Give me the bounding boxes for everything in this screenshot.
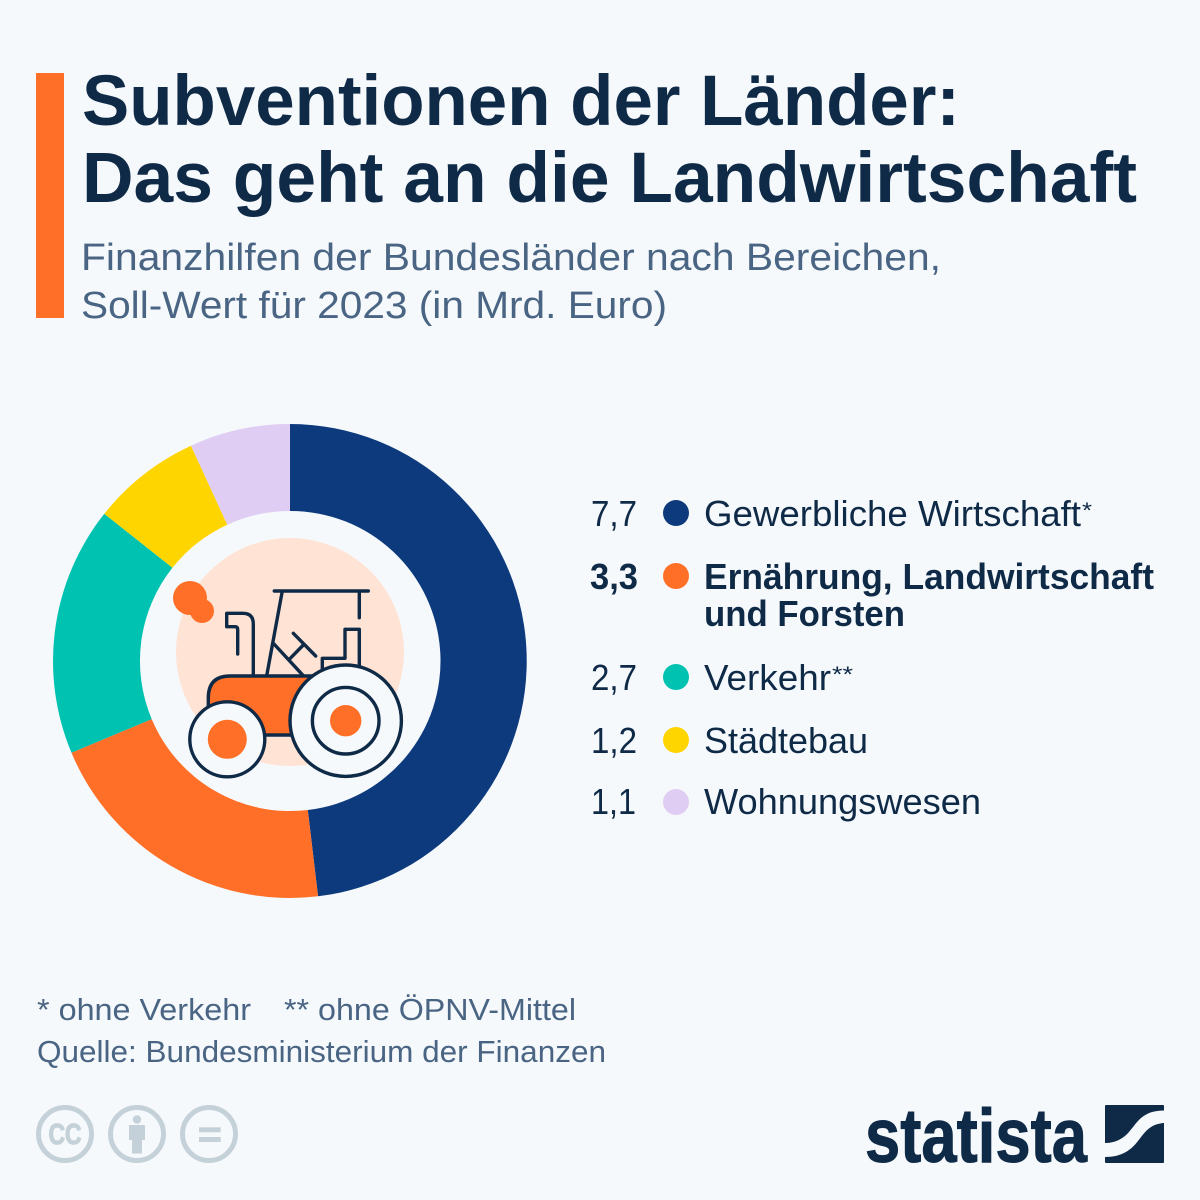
- segment: Verkehr: [53, 514, 172, 753]
- footnotes: ** ohne ÖPNV-Mittel: [284, 992, 576, 1027]
- legend row: Ernährung, Landwirtschaft und Forsten: 3,3: [590, 556, 638, 597]
- icon: smoke: [173, 581, 214, 623]
- title: Subventionen der Länder:: [82, 62, 960, 141]
- logo mark: [1105, 1105, 1164, 1163]
- legend: [590, 493, 1154, 822]
- accent bar: [36, 73, 64, 318]
- tractor body: [208, 676, 315, 735]
- legend row: Gewerbliche Wirtschaft: 7,7: [591, 493, 637, 534]
- icon: attribution: [110, 1108, 164, 1160]
- icon: tractor: [173, 538, 404, 777]
- subtitle: Soll-Wert für 2023 (in Mrd. Euro): [81, 285, 667, 327]
- legend row: Verkehr: 2,7: [591, 657, 637, 698]
- segment: Wohnungswesen: [191, 424, 290, 525]
- footnotes: * ohne Verkehr: [37, 992, 251, 1027]
- title: [82, 62, 1137, 218]
- icon: cc license: [38, 1108, 92, 1160]
- legend row: Städtebau: Städtebau: [704, 720, 868, 761]
- tractor front wheel: [190, 702, 265, 777]
- legend row: Gewerbliche Wirtschaft: Gewerbliche Wirtschaft: [704, 493, 1081, 534]
- source: Quelle: Bundesministerium der Finanzen: [37, 1034, 606, 1069]
- donut chart: [53, 424, 527, 898]
- legend row: Ernährung, Landwirtschaft und Forsten: [590, 556, 1154, 634]
- title: Das geht an die Landwirtschaft: [82, 139, 1137, 218]
- subtitle: [81, 237, 941, 327]
- footnotes: [37, 992, 606, 1069]
- tractor rear wheel: [290, 665, 401, 776]
- icon: cc license: CC: [48, 1119, 82, 1151]
- icon: no derivatives: [182, 1108, 236, 1160]
- segment: Ernährung, Landwirtschaft und Forsten: [72, 719, 318, 898]
- legend row: Wohnungswesen: 1,1: [591, 781, 636, 822]
- legend row: Ernährung, Landwirtschaft und Forsten: Ernährung, Landwirtschaft: [704, 556, 1154, 597]
- tractor cabin: [267, 591, 368, 676]
- segment: Städtebau: [104, 446, 227, 568]
- segment: Gewerbliche Wirtschaft: [290, 424, 527, 896]
- legend row: Verkehr: **: [832, 662, 854, 687]
- legend row: Ernährung, Landwirtschaft und Forsten: und Forsten: [704, 593, 905, 634]
- legend row: Städtebau: 1,2: [591, 720, 637, 761]
- legend row: Städtebau: [591, 720, 868, 761]
- legend row: Verkehr: [591, 657, 854, 698]
- subtitle: Finanzhilfen der Bundesländer nach Bereichen,: [81, 237, 941, 279]
- legend row: Verkehr: Verkehr: [704, 657, 831, 698]
- tractor exhaust: [227, 613, 253, 676]
- legend row: Gewerbliche Wirtschaft: *: [1082, 498, 1093, 523]
- logo wordmark: statista: [865, 1094, 1088, 1179]
- legend row: Wohnungswesen: Wohnungswesen: [704, 781, 981, 822]
